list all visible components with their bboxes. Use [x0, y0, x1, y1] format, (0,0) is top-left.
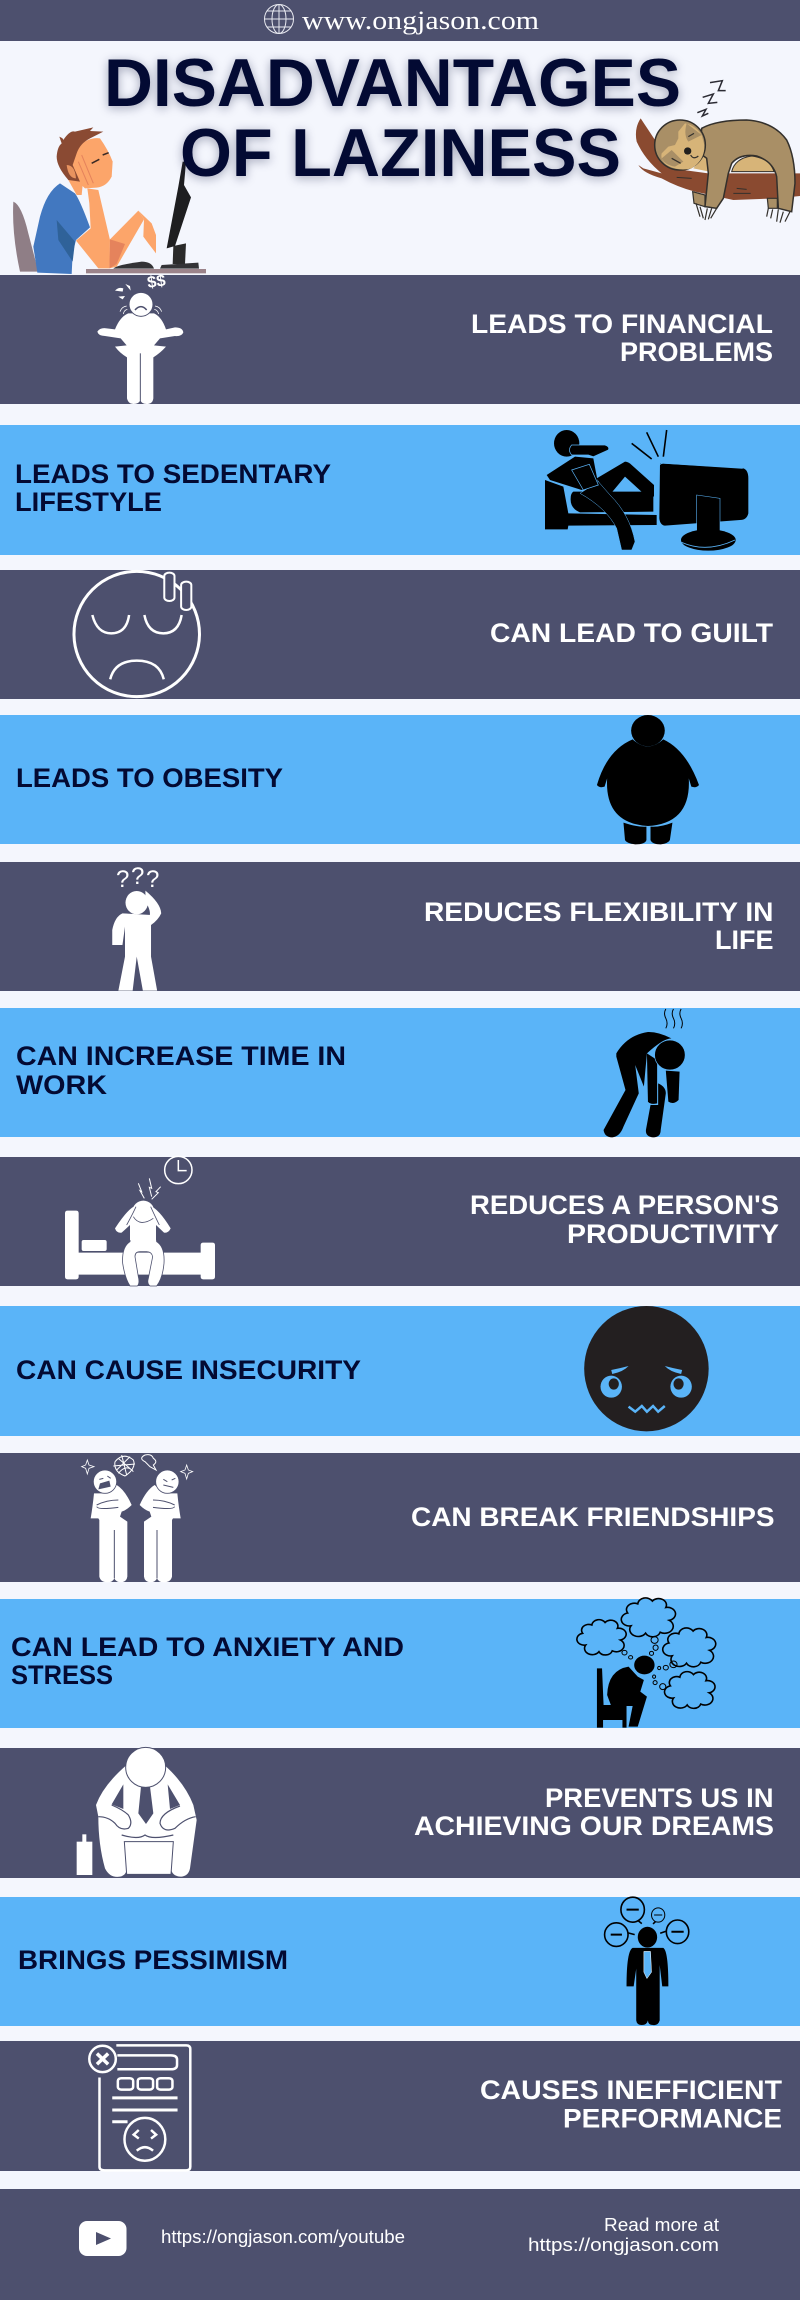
- panel: brings pessimism: [0, 1897, 800, 2026]
- panel: can break friendships: [0, 1453, 800, 1582]
- heading: LIFE: [715, 925, 774, 955]
- icon: obese person: [597, 715, 699, 844]
- heading: LEADS TO SEDENTARY: [15, 459, 331, 489]
- icon: confused person: [112, 863, 161, 991]
- icon: worried face: [584, 1306, 709, 1431]
- heading: PREVENTS US IN: [545, 1783, 774, 1813]
- panel: can increase time in work: [0, 1008, 800, 1137]
- icon: confused person: ?: [116, 866, 129, 893]
- panel: leads to sedentary lifestyle: [0, 425, 800, 555]
- icon: dejected businessman: [77, 1747, 197, 1877]
- icon: sad face with sweat drops: [74, 571, 199, 697]
- icon: confused person: ?: [131, 863, 144, 890]
- icon: person with empty pockets: $$: [146, 272, 167, 292]
- icon: youtube: [79, 2221, 126, 2256]
- heading: CAN INCREASE TIME IN: [16, 1041, 346, 1071]
- panel: reduces a person's productivity: [0, 1156, 800, 1286]
- icon: failed document: [89, 2045, 190, 2170]
- title: DISADVANTAGES: [104, 45, 681, 121]
- heading: CAN LEAD TO ANXIETY AND: [11, 1632, 404, 1662]
- heading: CAN BREAK FRIENDSHIPS: [411, 1502, 774, 1532]
- title: OF LAZINESS: [180, 115, 621, 191]
- title: [104, 45, 681, 191]
- read more text: https://ongjason.com: [528, 2235, 719, 2255]
- heading: [414, 1783, 774, 1841]
- illustration: tired man at computer: [13, 127, 206, 274]
- heading: PROBLEMS: [620, 337, 773, 367]
- website address: www.ongjason.com: [302, 6, 539, 35]
- panel: prevents us in achieving our dreams: [0, 1747, 800, 1878]
- heading: REDUCES A PERSON'S: [470, 1190, 779, 1220]
- heading: [15, 459, 331, 517]
- heading: [480, 2075, 782, 2134]
- heading: [470, 1190, 779, 1249]
- heading: LEADS TO FINANCIAL: [471, 309, 773, 339]
- heading: LEADS TO OBESITY: [16, 763, 283, 793]
- heading: [16, 1041, 346, 1100]
- heading: [11, 1632, 404, 1690]
- heading: REDUCES FLEXIBILITY IN: [424, 897, 774, 927]
- heading: BRINGS PESSIMISM: [18, 1945, 288, 1975]
- heading: CAN CAUSE INSECURITY: [16, 1355, 361, 1385]
- heading: PERFORMANCE: [563, 2104, 782, 2134]
- panel: reduces flexibility in life: [0, 862, 800, 991]
- read more text: [528, 2215, 719, 2255]
- header bar: [0, 0, 800, 41]
- icon: person on couch kicking monitor: [545, 430, 748, 551]
- icon: globe: [264, 4, 294, 34]
- footer: [0, 2189, 800, 2300]
- heading: CAN LEAD TO GUILT: [490, 618, 773, 648]
- panel: can lead to anxiety and stress: [0, 1598, 800, 1728]
- panel: can cause insecurity: [0, 1306, 800, 1436]
- panel: can lead to guilt: [0, 570, 800, 699]
- read more text: Read more at: [604, 2215, 719, 2235]
- heading: [471, 309, 773, 367]
- icon: man with negative speech bubbles: [605, 1897, 689, 2025]
- icon: confused person: ?: [146, 866, 159, 893]
- heading: CAUSES INEFFICIENT: [480, 2075, 782, 2105]
- icon: exhausted person bent over: [604, 1009, 685, 1137]
- panel: leads to obesity: [0, 715, 800, 844]
- icon: person with empty pockets: [97, 272, 183, 404]
- panel: causes inefficient performance: [0, 2041, 800, 2171]
- panel: leads to financial problems: [0, 272, 800, 404]
- heading: WORK: [16, 1070, 107, 1100]
- icon: two people arguing: [82, 1455, 193, 1582]
- heading: STRESS: [11, 1660, 113, 1690]
- heading: LIFESTYLE: [15, 487, 162, 517]
- heading: ACHIEVING OUR DREAMS: [414, 1811, 774, 1841]
- icon: stressed person with thought clouds: [577, 1598, 716, 1728]
- youtube link: https://ongjason.com/youtube: [161, 2227, 405, 2247]
- illustration: sleeping sloth: [636, 81, 800, 223]
- icon: stressed person on bed with clock: [65, 1156, 215, 1286]
- heading: [424, 897, 774, 955]
- heading: PRODUCTIVITY: [567, 1219, 779, 1249]
